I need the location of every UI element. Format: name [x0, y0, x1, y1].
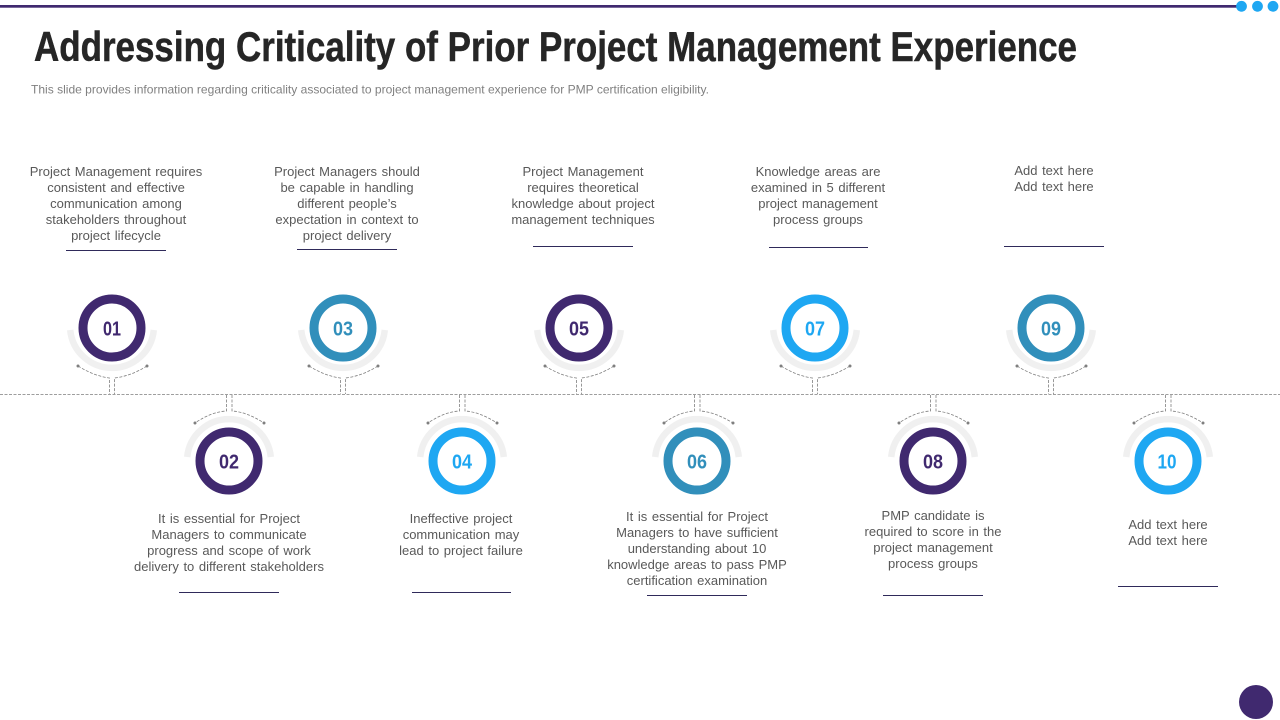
- text: step 09: Add text here: [1014, 163, 1094, 178]
- text: step 06: It is essential for Project: [626, 509, 768, 524]
- text: step 04: [399, 511, 523, 558]
- text: step 09: [1014, 163, 1094, 194]
- badge 05: 05: [569, 318, 589, 340]
- text: step 06: certification examination: [627, 573, 767, 588]
- badge 02: [200, 432, 258, 490]
- text: step 06: knowledge areas to pass PMP: [607, 557, 787, 572]
- step 09: [1004, 163, 1104, 394]
- text: step 04: Ineffective project: [410, 511, 513, 526]
- text: step 08: required to score in the: [865, 524, 1001, 539]
- text: step 01: stakeholders throughout: [46, 212, 187, 227]
- badge 07: 07: [805, 318, 825, 340]
- text: step 02: [134, 511, 324, 574]
- text: step 03: Project Managers should: [274, 164, 420, 179]
- text: step 03: [274, 164, 420, 243]
- text: step 09: Add text here: [1014, 179, 1094, 194]
- text: step 07: Knowledge areas are: [756, 164, 880, 179]
- timeline axis: [0, 394, 1280, 396]
- badge 03: [314, 299, 372, 357]
- text: step 07: examined in 5 different: [751, 180, 886, 195]
- text: step 01: consistent and effective: [47, 180, 185, 195]
- step 02: [134, 395, 324, 592]
- step 03: [274, 164, 420, 394]
- text: step 02: It is essential for Project: [158, 511, 300, 526]
- badge 09: 09: [1041, 318, 1061, 340]
- badge 03: 03: [333, 318, 353, 340]
- text: step 10: Add text here: [1128, 533, 1208, 548]
- step 04: [399, 395, 523, 592]
- step 10: [1118, 395, 1218, 586]
- text: step 03: different people’s: [297, 196, 397, 211]
- badge 10: [1139, 432, 1197, 490]
- text: step 02: progress and scope of work: [147, 543, 311, 558]
- badge 10: 10: [1158, 450, 1176, 474]
- text: step 05: management techniques: [511, 212, 655, 227]
- step 06: [607, 395, 787, 596]
- text: step 05: Project Management: [523, 164, 644, 179]
- text: step 08: process groups: [888, 556, 978, 571]
- text: step 04: lead to project failure: [399, 543, 523, 558]
- badge 05: [550, 299, 608, 357]
- badge 04: 04: [452, 450, 473, 474]
- step 07: [751, 164, 886, 394]
- text: step 01: communication among: [50, 196, 182, 211]
- text: step 06: Managers to have sufficient: [616, 525, 778, 540]
- text: step 03: project delivery: [303, 228, 392, 243]
- text: step 06: understanding about 10: [628, 541, 766, 556]
- text: step 10: Add text here: [1128, 517, 1208, 532]
- text: step 06: [607, 509, 787, 588]
- text: step 03: be capable in handling: [280, 180, 414, 195]
- text: step 07: process groups: [773, 212, 863, 227]
- step 01: [30, 164, 203, 394]
- badge 01: [83, 299, 141, 357]
- badge 08: 08: [923, 450, 943, 474]
- badge 04: [433, 432, 491, 490]
- badge 06: [668, 432, 726, 490]
- text: step 02: delivery to different stakeholders: [134, 559, 324, 574]
- text: step 07: [751, 164, 886, 227]
- text: step 08: project management: [873, 540, 993, 555]
- text: step 05: knowledge about project: [512, 196, 655, 211]
- text: step 01: project lifecycle: [71, 228, 161, 243]
- step 08: [865, 395, 1001, 596]
- subtitle: This slide provides information regarding criticality associated to project management experience for PMP certification eligibility.: [31, 82, 709, 96]
- text: step 04: communication may: [403, 527, 520, 542]
- text: step 05: requires theoretical: [527, 180, 639, 195]
- text: step 02: Managers to communicate: [151, 527, 307, 542]
- top bar with dots: [0, 1, 1278, 12]
- badge 06: 06: [687, 450, 707, 474]
- text: step 01: Project Management requires: [30, 164, 203, 179]
- step 05: [511, 164, 655, 394]
- text: step 07: project management: [758, 196, 878, 211]
- text: step 10: [1128, 517, 1208, 548]
- text: step 08: [865, 508, 1001, 571]
- text: step 08: PMP candidate is: [882, 508, 985, 523]
- badge 08: [904, 432, 962, 490]
- badge 01: 01: [103, 318, 121, 340]
- text: step 05: [511, 164, 655, 227]
- corner circle: [1239, 685, 1273, 719]
- badge 07: [786, 299, 844, 357]
- badge 09: [1022, 299, 1080, 357]
- text: step 03: expectation in context to: [275, 212, 419, 227]
- badge 02: 02: [219, 450, 239, 474]
- text: step 01: [30, 164, 203, 243]
- title: Addressing Criticality of Prior Project Management Experience: [34, 23, 1077, 70]
